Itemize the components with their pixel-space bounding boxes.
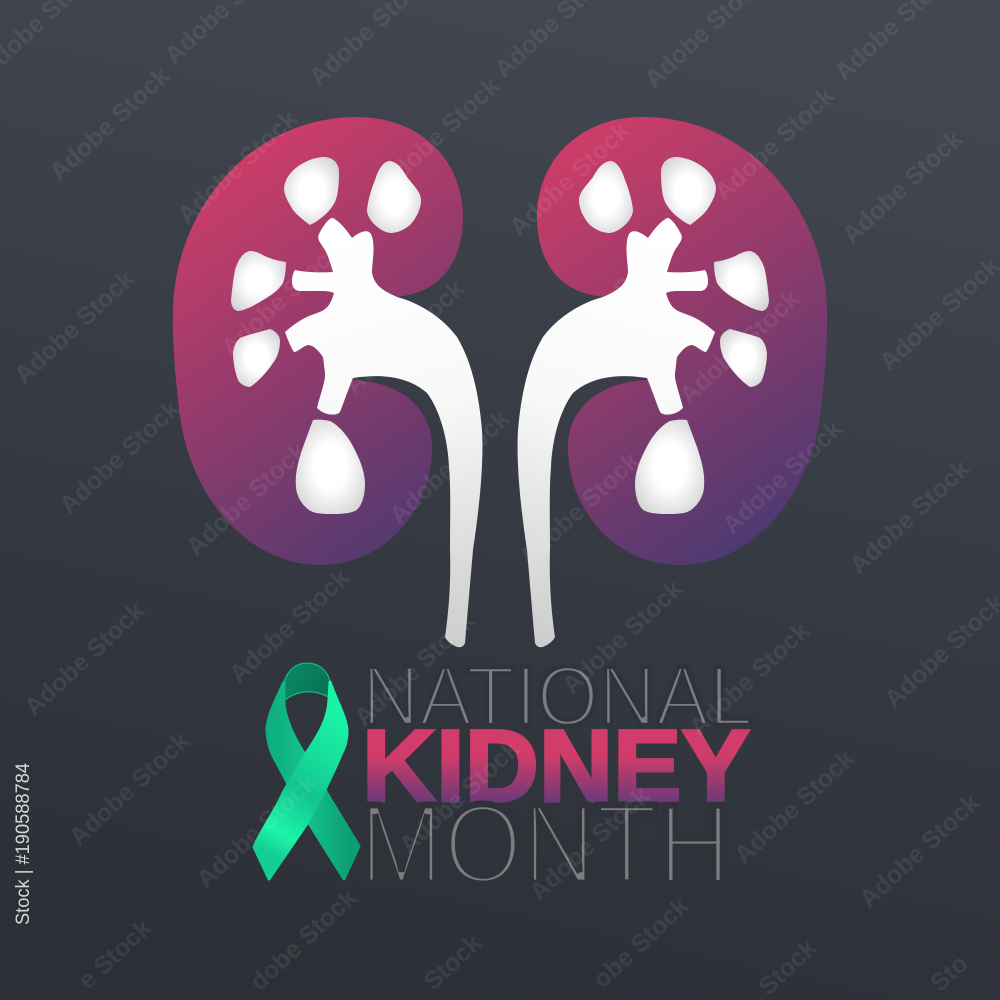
stock watermarks: Adobe Stock: [54, 395, 185, 519]
stock watermarks: Adobe Stock: [709, 82, 840, 206]
stock watermarks: Stock: [753, 934, 822, 1000]
awareness ribbon: [254, 663, 359, 879]
stock watermarks: Adobe Stock: [384, 405, 515, 529]
calyx stone 1 right: [661, 157, 716, 225]
stock watermarks: obe Stock: [588, 892, 694, 994]
calyx stone 4 left: [233, 329, 280, 387]
kidney body left: [173, 117, 463, 565]
stock watermarks: Adobe Stock: [216, 237, 347, 361]
calyx stone 1 left: [284, 157, 339, 225]
calyx stone 3 left: [231, 251, 286, 311]
stock watermarks: Stock: [418, 929, 487, 996]
stock watermarks: Adobe Stock: [729, 745, 860, 869]
stock watermarks: Adobe Stock: [394, 735, 525, 859]
ribbon right strip: [254, 682, 347, 879]
stock watermarks: Adobe Stock: [181, 437, 312, 561]
calyx stone 2 right: [579, 161, 633, 233]
heading: KIDNEY: KIDNEY: [362, 709, 750, 823]
calyx stone 2 left: [367, 161, 421, 233]
stock watermarks: Adobe Stock: [684, 617, 815, 741]
calyx stone 4 right: [720, 329, 767, 387]
ureter and renal pelvis right: [518, 218, 715, 647]
ureter and renal pelvis left: [285, 218, 482, 647]
stock watermarks: Adobe Stock: [837, 125, 968, 249]
calyx stone 3 right: [714, 251, 769, 311]
stock watermarks: Adobe Stock: [19, 597, 150, 721]
heading: NATIONAL: NATIONAL: [362, 649, 753, 743]
stock watermarks: Adobe Stock: [44, 62, 175, 186]
kidney body right: [537, 117, 827, 565]
stock watermarks: Adobe Stock: [854, 789, 985, 913]
stock watermarks: Adobe Stock: [224, 564, 355, 688]
stock watermarks: Adobe Stock: [674, 285, 805, 409]
stock watermarks: dobe Stock: [244, 884, 362, 996]
stock watermarks: Adobe Stock: [524, 782, 655, 906]
ribbon loop back: [284, 663, 330, 700]
stock watermarks: Adobe Stock: [9, 265, 140, 389]
stock watermarks: Adobe Stock: [546, 237, 677, 361]
stock watermarks: Adobe Stock: [514, 447, 645, 571]
stock watermarks: Adobe Stock: [504, 117, 635, 241]
stock watermarks: Adobe Stock: [557, 575, 688, 699]
stock watermarks: e Stock: [73, 914, 157, 995]
side stock number: Stock | #190588784: [13, 763, 34, 925]
calyx stone 5 right: [635, 420, 704, 514]
right kidney: [518, 117, 827, 647]
stock watermarks: Adobe Stock: [374, 72, 505, 196]
stock watermarks: Adobe Stock: [844, 455, 975, 579]
stock watermarks: Adobe Stock: [64, 727, 195, 851]
ribbon left strip: [267, 682, 359, 879]
stock watermarks: Adobe Stock: [717, 415, 848, 539]
left kidney: [173, 117, 482, 647]
stock watermarks: Sto: [925, 949, 974, 997]
stock watermarks: Adobe Stock: [191, 769, 322, 893]
stock watermarks: Adobe Stock: [172, 105, 303, 229]
stock watermarks: Adobe Stock: [349, 607, 480, 731]
stock watermarks: Adobe Stock: [339, 275, 470, 399]
heading: MONTH: MONTH: [359, 781, 731, 907]
calyx stone 5 left: [296, 420, 365, 514]
